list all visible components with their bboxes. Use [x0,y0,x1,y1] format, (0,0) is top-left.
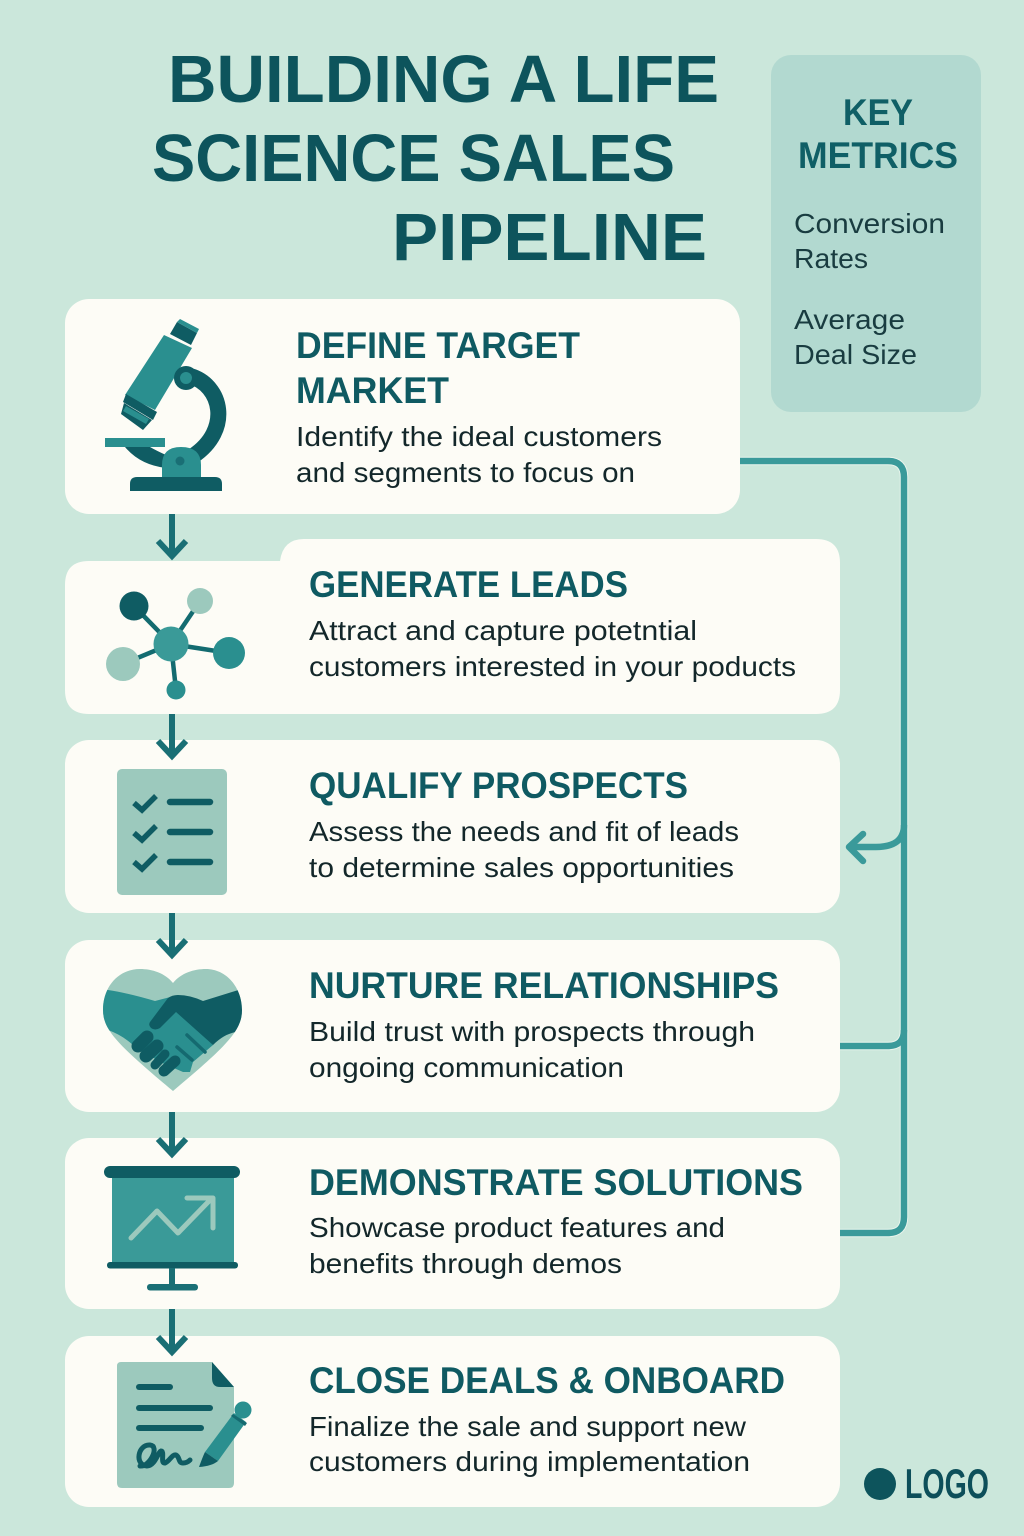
description: Showcase product features and [309,1212,725,1243]
logo [864,1460,989,1507]
heading: DEFINE TARGET [296,325,580,366]
panel: close deals and onboard [65,1336,840,1507]
heading: GENERATE LEADS [309,564,628,605]
key metrics heading [798,92,958,176]
panel: qualify prospects [65,740,840,913]
description: Finalize the sale and support new [309,1411,747,1442]
heading [296,325,580,411]
description [309,816,739,883]
metric: conversion rates [794,208,945,274]
panel: nurture relationships [65,940,840,1112]
title: SCIENCE SALES [152,121,675,196]
description: to determine sales opportunities [309,852,734,883]
description: customers interested in your poducts [309,651,796,682]
metric: average deal size: Deal Size [794,339,917,370]
heading: CLOSE DEALS & ONBOARD [309,1360,785,1401]
heading: DEMONSTRATE SOLUTIONS [309,1162,803,1203]
description [309,1212,725,1279]
description: customers during implementation [309,1446,750,1477]
heading: NURTURE RELATIONSHIPS [309,965,779,1006]
description [309,1411,750,1477]
panel: generate leads [65,539,840,714]
description [296,421,662,488]
arrow: step 5 to 6 [158,1309,186,1353]
metric: conversion rates: Rates [794,243,868,274]
arrow: step 4 to 5 [158,1112,186,1155]
feedback connector lines [740,461,904,1233]
arrow: step 3 to 4 [158,913,186,956]
icon: microscope [105,319,222,491]
panel: demonstrate solutions [65,1138,840,1309]
title [152,42,719,275]
description: and segments to focus on [296,457,635,488]
icon: signed document with pen [117,1362,252,1488]
panel: key metrics [771,55,981,412]
description: benefits through demos [309,1248,622,1279]
title: BUILDING A LIFE [168,42,719,117]
heading: MARKET [296,370,449,411]
arrow: step 2 to 3 [158,714,186,757]
description: Attract and capture potetntial [309,615,697,646]
metric: conversion rates: Conversion [794,208,945,239]
key metrics heading: KEY [843,92,913,133]
description: ongoing communication [309,1052,624,1083]
title: PIPELINE [392,200,707,275]
icon: heart with handshake [100,969,245,1091]
heading: QUALIFY PROSPECTS [309,765,688,806]
description: Assess the needs and fit of leads [309,816,739,847]
metric: average deal size [794,304,917,370]
description [309,615,796,682]
description [309,1016,755,1083]
arrow: step 1 to 2 [158,514,186,557]
icon: checklist [117,769,227,895]
metric: average deal size: Average [794,304,905,335]
description: Build trust with prospects through [309,1016,755,1047]
icon: molecule network [106,588,245,700]
icon: presentation screen [104,1166,240,1290]
description: Identify the ideal customers [296,421,662,452]
key metrics heading: METRICS [798,135,958,176]
panel: define target market [65,299,740,514]
